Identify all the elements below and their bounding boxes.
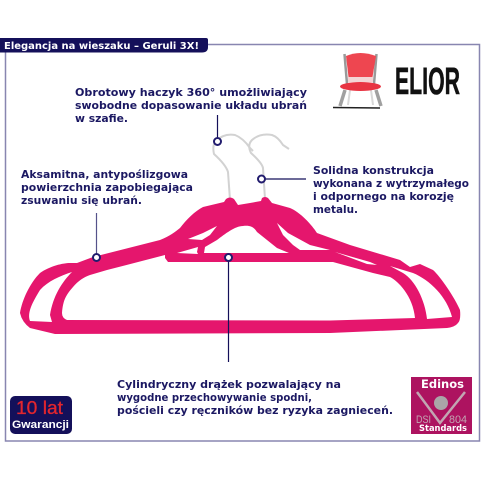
badge: 10 year warranty: Gwarancji: [12, 419, 69, 431]
frame: [6, 44, 480, 441]
text: cylindrical bar: [117, 378, 393, 417]
opening: between left arms: [29, 272, 72, 322]
header: Elegancja na wieszaku – Geruli 3X!: [4, 41, 199, 52]
hook: back hanger: [213, 135, 253, 200]
hanger bodies: [20, 197, 460, 334]
text: swivel hook: [75, 86, 307, 125]
text: velvet surface: powierzchnia zapobiegająca: [21, 181, 193, 194]
text: solid construction: wykonana z wytrzymałego: [313, 177, 469, 190]
callout: hook pointer: [214, 115, 221, 145]
opening: left wedge: [177, 247, 198, 254]
text: swivel hook: w szafie.: [75, 112, 128, 125]
callout: bar pointer: [225, 254, 232, 362]
text: swivel hook: swobodne dopasowanie układu ubrań: [75, 99, 307, 112]
opening: left lens: [188, 226, 217, 240]
header: [0, 38, 208, 52]
badge: Edinos standards: 804: [449, 414, 467, 426]
hangers: [20, 135, 460, 334]
text: cylindrical bar: Cylindryczny drążek pozwalający na: [117, 378, 341, 391]
callout: surface pointer: [93, 213, 100, 261]
opening: right lens: [277, 223, 330, 250]
opening: right arm sliver: [335, 252, 377, 265]
opening: main lower space: [62, 255, 415, 320]
text: swivel hook: Obrotowy haczyk 360° umożliwiający: [75, 86, 307, 99]
logo: Elior: [333, 53, 460, 108]
text: cylindrical bar: wygodne przechowywanie spodni,: [117, 391, 312, 404]
opening: upper triangle: [204, 226, 289, 253]
text: solid construction: i odpornego na korozję: [313, 190, 454, 203]
hook: front hanger: [249, 135, 289, 199]
opening: right arm space: [390, 266, 452, 319]
text: solid construction: metalu.: [313, 203, 358, 216]
callout: construction pointer: [258, 176, 306, 182]
text: velvet surface: [21, 168, 193, 207]
icon: chair: [333, 53, 381, 108]
text: velvet surface: zsuwaniu się ubrań.: [21, 194, 142, 207]
text: solid construction: Solidna konstrukcja: [313, 164, 434, 177]
badge: Edinos standards: Standards: [419, 424, 467, 434]
badge: Edinos standards: Edinos: [421, 377, 464, 391]
badge: 10 year warranty: 10 lat: [16, 398, 63, 418]
badge: 10 year warranty: [10, 396, 72, 434]
badge: Edinos standards: DSI: [416, 414, 431, 426]
text: solid construction: [313, 164, 469, 216]
text: velvet surface: Aksamitna, antypoślizgowa: [21, 168, 188, 181]
text: cylindrical bar: pościeli czy ręczników bez ryzyka zagnieceń.: [117, 404, 393, 417]
badge: Edinos standards: [411, 377, 472, 434]
